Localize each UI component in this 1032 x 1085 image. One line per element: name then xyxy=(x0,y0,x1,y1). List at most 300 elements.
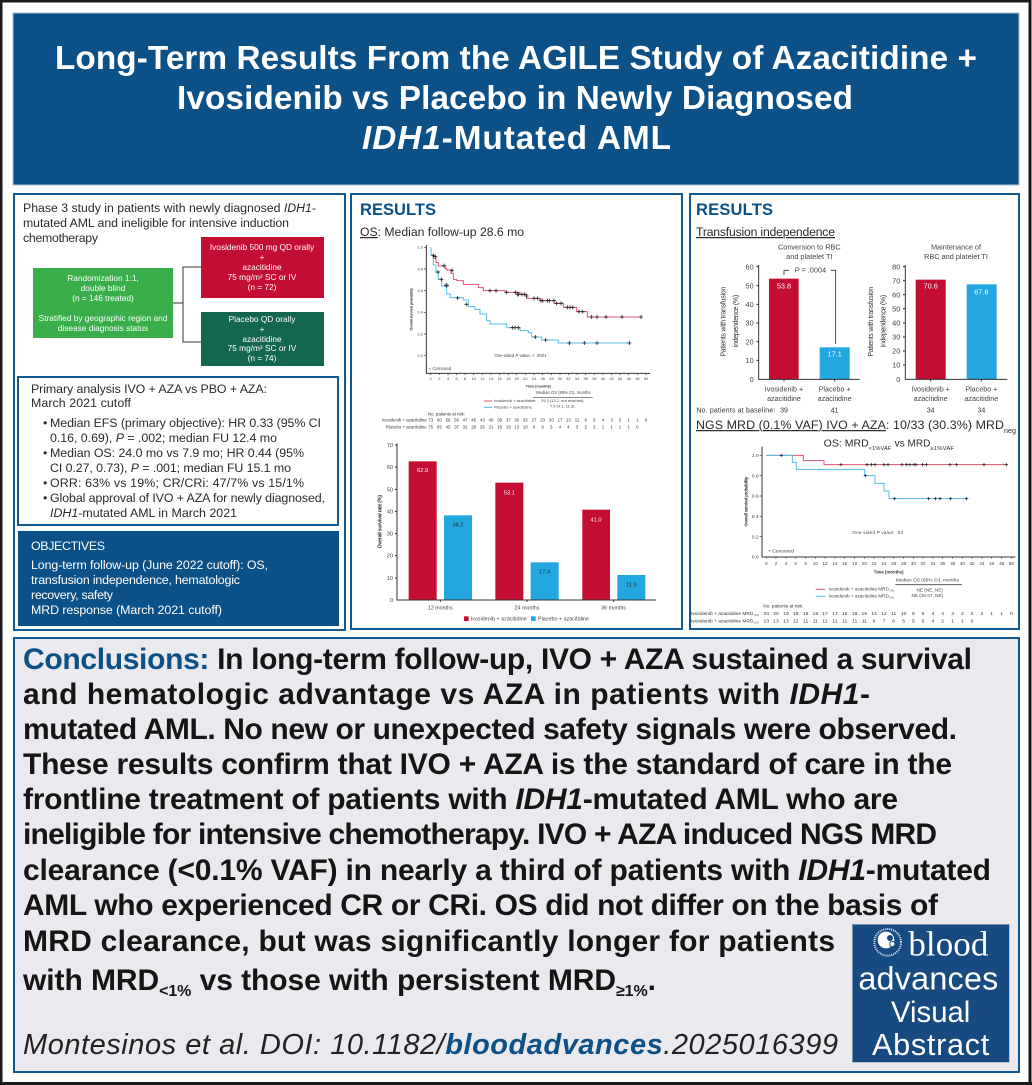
chart: Kaplan-Meier OS by MRD: 22 xyxy=(871,561,877,566)
chart: Kaplan-Meier overall survival: 42 xyxy=(609,376,615,381)
chart: Kaplan-Meier overall survival: 47 xyxy=(463,418,468,423)
chart: Kaplan-Meier OS by MRD: 19 xyxy=(783,611,789,617)
chart: Kaplan-Meier overall survival: 10 xyxy=(471,376,477,381)
chart: Kaplan-Meier OS by MRD: 18 xyxy=(852,561,858,566)
primary analysis box: • xyxy=(43,491,47,505)
chart: Kaplan-Meier OS by MRD: 11 xyxy=(822,619,828,625)
chart: Kaplan-Meier overall survival: 40 xyxy=(601,376,606,381)
chart: Kaplan-Meier OS by MRD: 4 xyxy=(932,611,935,617)
objectives box: recovery, safety xyxy=(31,588,114,602)
chart: conversion to TI bars: Ivosidenib + xyxy=(765,386,803,394)
chart: Kaplan-Meier overall survival: 73 xyxy=(428,418,434,423)
title banner: IDH1-Mutated AML xyxy=(362,120,671,157)
citation: Montesinos et al. DOI: 10.1182/bloodadvances.2025016399 xyxy=(23,1029,838,1061)
chart: Kaplan-Meier overall survival: 1 xyxy=(627,425,630,430)
chart: Kaplan-Meier OS by MRD: 6 xyxy=(794,561,797,566)
panel: study design xyxy=(14,194,345,630)
chart: maintenance of TI bars: independence (%) xyxy=(880,295,887,347)
ivosidenib arm box: (n = 72) xyxy=(248,282,277,292)
conclusions text: Conclusions: In long-term follow-up, IVO + AZA sustained a survival xyxy=(23,643,972,676)
chart: Kaplan-Meier overall survival: 20 xyxy=(514,376,520,381)
chart: Kaplan-Meier overall survival: 1 xyxy=(636,418,639,423)
logo: blood advances visual abstract: Visual xyxy=(891,996,970,1029)
chart: maintenance of TI bars: azacitidine xyxy=(914,395,948,403)
chart: Kaplan-Meier overall survival: Placebo + azacitidine xyxy=(386,425,427,430)
chart: conversion to TI bars: 40 xyxy=(746,300,754,309)
chart: Kaplan-Meier overall survival: 20 xyxy=(549,418,554,423)
chart: Kaplan-Meier overall survival: 50 xyxy=(644,376,649,381)
chart: Kaplan-Meier overall survival: 12 xyxy=(480,376,485,381)
chart: Kaplan-Meier OS by MRD: 40 xyxy=(960,561,965,566)
chart: Kaplan-Meier OS by MRD: 0 xyxy=(765,561,768,566)
chart: Kaplan-Meier overall survival: 40 xyxy=(489,418,494,423)
chart: Kaplan-Meier overall survival: 27 xyxy=(532,418,537,423)
chart: Kaplan-Meier OS by MRD: 0.0 xyxy=(752,555,759,561)
chart: Kaplan-Meier OS by MRD: 11 xyxy=(803,619,808,625)
primary analysis box: Median EFS (primary objective): HR 0.33 (95% CI xyxy=(50,416,321,430)
chart: Kaplan-Meier overall survival: 13 xyxy=(514,425,520,430)
conclusions text: and hematologic advantage vs AZA in patients with IDH1- xyxy=(23,678,870,711)
chart: Kaplan-Meier overall survival: Ivosidenib + azacitidine xyxy=(382,418,427,423)
chart: Kaplan-Meier overall survival: 19 xyxy=(497,425,503,430)
chart: Kaplan-Meier OS by MRD: 5 xyxy=(922,611,925,617)
conclusions text: mutated AML. No new or unexpected safety signals were observed. xyxy=(23,713,957,746)
chart: Kaplan-Meier overall survival: 6 xyxy=(541,425,544,430)
chart: Kaplan-Meier OS by MRD: 1 xyxy=(990,611,993,617)
chart: Kaplan-Meier OS by MRD: Ivosidenib + azacitidine MRD xyxy=(829,587,889,592)
study description: Phase 3 study in patients with newly diagnosed IDH1- xyxy=(23,201,316,215)
title banner: Ivosidenib vs Placebo in Newly Diagnosed xyxy=(177,80,853,117)
logo: blood advances visual abstract xyxy=(852,924,1009,1062)
chart: Kaplan-Meier overall survival: 34 xyxy=(575,376,580,381)
chart: Kaplan-Meier OS by MRD: 18 xyxy=(803,611,809,617)
primary analysis box: Global approval of IVO + AZA for newly diagnosed, xyxy=(50,491,325,505)
chart: Kaplan-Meier OS by MRD: 48 xyxy=(999,561,1005,566)
chart: conversion to TI bars: 17.1 xyxy=(828,349,842,358)
icon: society seal xyxy=(874,929,901,956)
chart: Kaplan-Meier overall survival: 1.0 xyxy=(417,245,424,250)
chart: Kaplan-Meier overall survival: 21 xyxy=(489,425,494,430)
logo: blood advances visual abstract: blood xyxy=(908,925,989,964)
chart: Kaplan-Meier OS by MRD: <1% xyxy=(889,589,895,593)
placebo arm box: Placebo QD orally xyxy=(229,314,296,324)
chart: conversion to TI bars: 10 xyxy=(746,356,754,365)
conclusions text: with MRD xyxy=(23,964,159,997)
chart: Kaplan-Meier OS by MRD xyxy=(691,439,1015,625)
chart: Kaplan-Meier overall survival xyxy=(382,245,650,430)
chart: Kaplan-Meier overall survival: 50 xyxy=(454,418,460,423)
chart: Kaplan-Meier OS by MRD: 2 xyxy=(961,611,964,617)
chart: maintenance of TI bars: RBC and platelet TI xyxy=(924,252,988,261)
chart: overall survival rate bars: 17.4 xyxy=(539,569,550,575)
chart: maintenance of TI bars: 67.6 xyxy=(974,287,988,296)
NGS MRD subheading: NGS MRD (0.1% VAF) IVO + AZA: 10/33 (30.3%) MRD xyxy=(696,418,1004,432)
chart: Kaplan-Meier overall survival: 56 xyxy=(446,418,451,423)
chart: Kaplan-Meier overall survival: 1 xyxy=(610,425,613,430)
chart: overall survival rate bars: 24 months xyxy=(515,605,540,611)
chart: Kaplan-Meier overall survival: + Censored xyxy=(429,366,452,371)
chart: Kaplan-Meier OS by MRD: 4 xyxy=(941,611,944,617)
chart: conversion to TI bars: Placebo + xyxy=(819,386,851,394)
placebo arm box: (n = 74) xyxy=(248,353,277,363)
chart: Kaplan-Meier OS by MRD: 11 xyxy=(891,611,896,617)
randomization box: Stratified by geographic region and xyxy=(39,313,168,323)
chart: Kaplan-Meier OS by MRD: 8 xyxy=(912,611,915,617)
chart: conversion to TI bars: P = .0004 xyxy=(795,266,826,275)
chart: Kaplan-Meier overall survival: 10 xyxy=(523,425,528,430)
chart: Kaplan-Meier overall survival: 25 xyxy=(480,425,485,430)
chart: conversion to TI bars: 0 xyxy=(750,375,754,384)
chart: overall survival rate bars: 11.9 xyxy=(626,583,637,589)
chart: maintenance of TI bars: 50 xyxy=(892,304,900,313)
chart: Kaplan-Meier overall survival: 1 xyxy=(627,418,630,423)
chart: Kaplan-Meier overall survival: 36 xyxy=(583,376,589,381)
chart: maintenance of TI bars: 80 xyxy=(892,262,900,271)
objectives box: Long-term follow-up (June 2022 cutoff): OS, xyxy=(31,558,268,572)
chart: Kaplan-Meier OS by MRD: 0.6 xyxy=(752,494,759,500)
chart: Kaplan-Meier overall survival: 32 xyxy=(463,425,468,430)
chart: Kaplan-Meier OS by MRD: + Censored xyxy=(768,548,794,554)
chart: Kaplan-Meier OS by MRD: 11 xyxy=(862,619,867,625)
randomization box: double blind xyxy=(81,283,126,293)
objectives box: MRD response (March 2021 cutoff) xyxy=(31,603,222,617)
randomization box: (n = 146 treated) xyxy=(72,293,134,303)
chart: Kaplan-Meier overall survival: 0.6 xyxy=(417,288,424,293)
ivosidenib arm box: + xyxy=(260,252,265,262)
chart: Kaplan-Meier overall survival: Placebo + azacitidine: xyxy=(494,404,533,409)
chart: overall survival rate bars: 40 xyxy=(387,509,393,515)
conclusions text: frontline treatment of patients with IDH1-mutated AML who are xyxy=(23,783,898,816)
patients at baseline row: 39 xyxy=(780,408,788,415)
chart: Kaplan-Meier OS by MRD: 16 xyxy=(842,611,848,617)
chart: Kaplan-Meier OS by MRD: 4 xyxy=(785,561,788,566)
chart: Kaplan-Meier OS by MRD: 0 xyxy=(1010,611,1013,617)
chart: Kaplan-Meier OS by MRD: 0.2 xyxy=(752,534,759,540)
ivosidenib arm box: azacitidine xyxy=(242,262,282,272)
chart: Kaplan-Meier overall survival: 2 xyxy=(584,425,587,430)
chart: Kaplan-Meier overall survival: 14 xyxy=(489,376,494,381)
chart: Kaplan-Meier OS by MRD: Ivosidenib + azacitidine MRD xyxy=(691,620,753,625)
chart: Kaplan-Meier overall survival: 75 xyxy=(428,425,434,430)
conclusions text: AML who experienced CR or CRi. OS did not differ on the basis of xyxy=(23,889,939,922)
chart: maintenance of TI bars: Ivosidenib + xyxy=(911,386,950,394)
conclusions text: clearance (<0.1% VAF) in nearly a third of patients with IDH1-mutated xyxy=(23,854,991,887)
conclusions text: . xyxy=(648,964,656,997)
chart: Kaplan-Meier overall survival: 39 xyxy=(497,418,503,423)
chart: overall survival rate bars: 60 xyxy=(387,465,393,471)
chart: Kaplan-Meier OS by MRD: 2 xyxy=(775,561,778,566)
placebo arm box xyxy=(201,312,324,366)
primary analysis box: March 2021 cutoff xyxy=(31,396,132,410)
chart: Kaplan-Meier OS by MRD: 11 xyxy=(832,619,838,625)
chart: Kaplan-Meier OS by MRD: 16 xyxy=(852,611,858,617)
conclusions text: ≥1% xyxy=(616,983,648,1000)
chart: Kaplan-Meier OS by MRD: 1.0 xyxy=(752,453,759,459)
chart: conversion to TI bars xyxy=(721,242,860,403)
chart: conversion to TI bars: Conversion to RBC xyxy=(778,242,841,251)
randomization box: disease diagnosis status xyxy=(58,323,148,333)
chart: Kaplan-Meier overall survival: 29.3 (13.2, not reached) xyxy=(541,398,584,403)
chart: Kaplan-Meier overall survival: 16 xyxy=(497,376,503,381)
chart: Kaplan-Meier OS by MRD: No. patients at risk: xyxy=(763,604,803,609)
patients at baseline row: 34 xyxy=(977,408,985,415)
chart: Kaplan-Meier OS by MRD: <1%VAF xyxy=(869,446,892,452)
chart: maintenance of TI bars: 70.6 xyxy=(924,281,938,290)
placebo arm box: azacitidine xyxy=(242,334,282,344)
chart: Kaplan-Meier OS by MRD: 24 xyxy=(881,561,887,566)
chart: Kaplan-Meier overall survival: 37 xyxy=(506,418,511,423)
chart: Kaplan-Meier OS by MRD: 11 xyxy=(842,619,847,625)
chart: Kaplan-Meier overall survival: 46 xyxy=(626,376,632,381)
chart: Kaplan-Meier OS by MRD: 13 xyxy=(773,619,779,625)
chart: Kaplan-Meier overall survival: 4 xyxy=(602,418,605,423)
chart: Kaplan-Meier OS by MRD: 38 xyxy=(950,561,956,566)
chart: Kaplan-Meier overall survival: 2 xyxy=(438,376,441,381)
chart: Kaplan-Meier OS by MRD: 46 xyxy=(989,561,995,566)
transfusion independence subheading: Transfusion independence xyxy=(696,225,835,239)
chart: Kaplan-Meier OS by MRD: 18 xyxy=(813,611,818,617)
chart: Kaplan-Meier overall survival: 0.4 xyxy=(417,310,424,315)
chart: overall survival rate bars: Ivosidenib + azacitidine xyxy=(471,616,527,622)
chart: Kaplan-Meier overall survival: 3 xyxy=(619,418,622,423)
chart: Kaplan-Meier OS by MRD: 13 xyxy=(783,619,789,625)
chart: Kaplan-Meier overall survival: 43 xyxy=(480,418,485,423)
logo: blood advances visual abstract: Abstract xyxy=(872,1028,990,1062)
chart: Kaplan-Meier overall survival: 8 xyxy=(533,425,536,430)
chart: Kaplan-Meier overall survival: 3 xyxy=(576,425,579,430)
patients at baseline row: No. patients at baseline: xyxy=(696,408,775,415)
patients at baseline row: 41 xyxy=(831,408,839,415)
chart: Kaplan-Meier OS by MRD: 50 xyxy=(1009,561,1014,566)
conclusions text: MRD clearance, but was significantly longer for patients xyxy=(23,925,835,958)
chart: Kaplan-Meier OS by MRD: 19 xyxy=(793,611,799,617)
chart: maintenance of TI bars: azacitidine xyxy=(964,395,998,403)
chart: Kaplan-Meier overall survival: 1 xyxy=(602,425,605,430)
chart: Kaplan-Meier overall survival: 18 xyxy=(506,376,511,381)
chart: Kaplan-Meier OS by MRD: 14 xyxy=(832,561,838,566)
chart: Kaplan-Meier overall survival: Overall survival probability xyxy=(410,287,414,331)
chart: Kaplan-Meier OS by MRD: 13 xyxy=(764,619,769,625)
objectives box xyxy=(18,531,339,626)
chart: overall survival rate bars: 53.1 xyxy=(504,490,515,496)
study description xyxy=(23,201,316,245)
chart: Kaplan-Meier overall survival: 48 xyxy=(635,376,640,381)
patients at baseline row: 34 xyxy=(927,408,935,415)
primary analysis box: ORR: 63% vs 19%; CR/CRi: 47/7% vs 15/1% xyxy=(50,476,304,490)
primary analysis box xyxy=(18,377,338,525)
chart: maintenance of TI bars: 70 xyxy=(892,276,900,285)
chart: conversion to TI bars: azacitidine xyxy=(818,395,852,403)
chart: Kaplan-Meier overall survival: 19 xyxy=(506,425,511,430)
chart: Kaplan-Meier OS by MRD: 20 xyxy=(764,611,769,617)
chart: Kaplan-Meier overall survival: Ivosidenib + azacitidine: xyxy=(494,398,536,403)
chart: Kaplan-Meier OS by MRD: 2 xyxy=(981,611,984,617)
chart: Kaplan-Meier OS by MRD: 17 xyxy=(832,611,838,617)
chart: Kaplan-Meier OS by MRD: NE (20.07, NE) xyxy=(912,593,944,598)
chart: maintenance of TI bars: Patients with transfusion xyxy=(868,287,875,357)
chart: Kaplan-Meier OS by MRD: 26 xyxy=(891,561,897,566)
chart: Kaplan-Meier OS by MRD: 32 xyxy=(920,561,926,566)
chart: Kaplan-Meier OS by MRD: Ivosidenib + azacitidine MRD xyxy=(691,612,753,617)
chart: Kaplan-Meier overall survival: 45 xyxy=(471,418,477,423)
chart: maintenance of TI bars: 40 xyxy=(892,319,900,328)
chart: overall survival rate bars: 12 months xyxy=(428,605,453,611)
chart: Kaplan-Meier overall survival: 8 xyxy=(464,376,467,381)
primary analysis box: Median OS: 24.0 mo vs 7.9 mo; HR 0.44 (95% xyxy=(50,446,304,460)
chart: Kaplan-Meier OS by MRD: 11 xyxy=(813,619,818,625)
chart: Kaplan-Meier overall survival: 4 xyxy=(559,425,562,430)
chart: Kaplan-Meier OS by MRD: 10 xyxy=(901,611,907,617)
chart: Kaplan-Meier OS by MRD: vs MRD xyxy=(895,439,930,450)
chart: Kaplan-Meier overall survival: 45 xyxy=(446,425,451,430)
chart: Kaplan-Meier overall survival: 0 xyxy=(645,418,648,423)
chart: conversion to TI bars: Patients with transfusion xyxy=(721,287,728,357)
chart: Kaplan-Meier OS by MRD: 16 xyxy=(862,611,867,617)
chart: conversion to TI bars: 50 xyxy=(746,281,754,290)
chart: Kaplan-Meier OS by MRD: Overall survival probability xyxy=(743,476,748,527)
chart: Kaplan-Meier OS by MRD: One-sided P value: .03 xyxy=(852,530,903,535)
conclusions text: <1% xyxy=(159,983,191,1000)
chart: Kaplan-Meier overall survival: 22 xyxy=(523,376,528,381)
chart: Kaplan-Meier OS by MRD: 1 xyxy=(961,619,964,625)
chart: maintenance of TI bars: 10 xyxy=(892,361,900,370)
chart: conversion to TI bars: 60 xyxy=(746,262,754,271)
chart: Kaplan-Meier OS by MRD: 7 xyxy=(883,619,886,625)
logo: blood advances visual abstract: advances xyxy=(858,960,998,996)
conclusions text: ineligible for intensive chemotherapy. IVO + AZA induced NGS MRD xyxy=(23,818,937,851)
chart: Kaplan-Meier OS by MRD: 5 xyxy=(922,619,925,625)
conclusions text: vs those with persistent MRD xyxy=(191,964,616,997)
chart: maintenance of TI bars xyxy=(868,242,1007,403)
results heading: RESULTS xyxy=(360,201,436,219)
chart: Kaplan-Meier OS by MRD: 0.4 xyxy=(752,514,759,520)
chart: conversion to TI bars: azacitidine xyxy=(767,395,801,403)
chart: Kaplan-Meier overall survival: 8 xyxy=(584,418,587,423)
chart: Kaplan-Meier OS by MRD: OS: MRD xyxy=(824,439,869,450)
chart: Kaplan-Meier OS by MRD: 44 xyxy=(979,561,985,566)
ivosidenib arm box xyxy=(201,237,324,298)
study description: mutated AML and ineligible for intensive induction xyxy=(23,216,289,230)
chart: Kaplan-Meier overall survival: 5 xyxy=(593,418,596,423)
chart: Kaplan-Meier overall survival: 0.0 xyxy=(417,353,424,358)
chart: conversion to TI bars: and platelet TI xyxy=(786,252,832,261)
chart: overall survival rate bars: 38.2 xyxy=(452,523,464,529)
title banner: Long-Term Results From the AGILE Study of Azacitidine + xyxy=(55,40,977,77)
chart: Kaplan-Meier overall survival: 23 xyxy=(540,418,546,423)
chart: maintenance of TI bars: 30 xyxy=(892,333,900,342)
chart: Kaplan-Meier overall survival: 44 xyxy=(618,376,623,381)
chart: Kaplan-Meier OS by MRD: 0 xyxy=(971,619,974,625)
chart: Kaplan-Meier overall survival: 55 xyxy=(437,425,442,430)
chart: Kaplan-Meier overall survival: 13 xyxy=(566,418,571,423)
chart: maintenance of TI bars: Placebo + xyxy=(965,386,997,394)
chart: Kaplan-Meier OS by MRD: 5 xyxy=(902,619,905,625)
chart: Kaplan-Meier OS by MRD: 8 xyxy=(804,561,807,566)
chart: Kaplan-Meier overall survival: Median OS (95% CI), months xyxy=(536,390,590,395)
chart: overall survival rate bars: Placebo + azacitidine xyxy=(538,616,589,622)
chart: Kaplan-Meier overall survival: 32 xyxy=(523,418,528,423)
objectives box: OBJECTIVES xyxy=(31,539,105,553)
chart: Kaplan-Meier OS by MRD: 4 xyxy=(932,619,935,625)
chart: Kaplan-Meier OS by MRD: 6 xyxy=(892,619,895,625)
chart: Kaplan-Meier overall survival: One-sided P value: < .0001 xyxy=(494,353,547,358)
chart: overall survival rate bars: 20 xyxy=(387,554,393,560)
panel: transfusion independence and MRD results xyxy=(690,194,1019,629)
chart: overall survival rate bars: 0 xyxy=(390,598,393,604)
chart: Kaplan-Meier OS by MRD: 42 xyxy=(969,561,975,566)
chart: Kaplan-Meier OS by MRD: 12 xyxy=(881,611,887,617)
chart: Kaplan-Meier overall survival: 36 xyxy=(514,418,520,423)
chart: Kaplan-Meier OS by MRD: 14 xyxy=(871,611,877,617)
results heading: RESULTS xyxy=(696,201,773,219)
chart: Kaplan-Meier overall survival: 28 xyxy=(471,425,477,430)
primary analysis box: IDH1-mutated AML in March 2021 xyxy=(50,506,237,520)
chart: Kaplan-Meier OS by MRD: 9 xyxy=(873,619,876,625)
chart: overall survival rate bars: Overall survival rate (%) xyxy=(378,495,384,548)
chart: Kaplan-Meier OS by MRD: 1 xyxy=(1000,611,1003,617)
chart: Kaplan-Meier overall survival: 32 xyxy=(566,376,571,381)
randomization box xyxy=(33,268,173,338)
chart: maintenance of TI bars: 60 xyxy=(892,290,900,299)
chart: Kaplan-Meier overall survival: 1 xyxy=(619,425,622,430)
chart: Kaplan-Meier OS by MRD: 20 xyxy=(862,561,867,566)
chart: conversion to TI bars: 20 xyxy=(746,337,754,346)
primary analysis box: CI 0.27, 0.73), P = .001; median FU 15.1 mo xyxy=(50,461,291,475)
chart: overall survival rate bars: 70 xyxy=(387,443,393,449)
chart: Kaplan-Meier OS by MRD: 2 xyxy=(971,611,974,617)
primary analysis box: • xyxy=(43,446,47,460)
chart: Kaplan-Meier OS by MRD: 34 xyxy=(930,561,936,566)
chart: Kaplan-Meier OS by MRD: ≥1% xyxy=(889,596,895,600)
randomization box: Randomization 1:1, xyxy=(67,273,139,283)
chart: Kaplan-Meier OS by MRD: <1% xyxy=(753,613,759,617)
chart: Kaplan-Meier overall survival: 30 xyxy=(558,376,563,381)
chart: Kaplan-Meier OS by MRD: 20 xyxy=(773,611,779,617)
study description: chemotherapy xyxy=(23,231,99,245)
chart: overall survival rate bars: 30 xyxy=(387,532,393,538)
chart: Kaplan-Meier overall survival: 6 xyxy=(456,376,459,381)
chart: overall survival rate bars: 62.9 xyxy=(417,468,428,474)
chart: Kaplan-Meier overall survival: 26 xyxy=(540,376,546,381)
chart: Kaplan-Meier overall survival: Time (months) xyxy=(526,384,552,388)
chart: maintenance of TI bars: 20 xyxy=(892,347,900,356)
chart: Kaplan-Meier overall survival: 0 xyxy=(636,425,639,430)
chart: Kaplan-Meier OS by MRD: 36 xyxy=(940,561,946,566)
chart: Kaplan-Meier overall survival: 3 xyxy=(610,418,613,423)
chart: overall survival rate bars: 10 xyxy=(387,576,393,582)
chart: Kaplan-Meier OS by MRD: 28 xyxy=(901,561,907,566)
chart: Kaplan-Meier OS by MRD: 16 xyxy=(842,561,848,566)
chart: Kaplan-Meier OS by MRD: 12 xyxy=(793,619,799,625)
chart: Kaplan-Meier OS by MRD: ≥1% xyxy=(753,621,759,625)
primary analysis box: • xyxy=(43,416,47,430)
chart: conversion to TI bars: 53.8 xyxy=(777,281,791,290)
chart: overall survival rate bars: 50 xyxy=(387,487,393,493)
OS subheading: OS: Median follow-up 28.6 mo xyxy=(360,225,524,239)
chart: Kaplan-Meier OS by MRD: 1 xyxy=(951,619,954,625)
chart: Kaplan-Meier OS by MRD: 11 xyxy=(852,619,857,625)
chart: maintenance of TI bars: Maintenance of xyxy=(931,242,982,251)
conclusions text xyxy=(22,643,991,1000)
panel: conclusions xyxy=(14,638,1019,1072)
patients at baseline row xyxy=(696,408,985,415)
chart: overall survival rate bars: 41.0 xyxy=(590,517,602,523)
chart: Kaplan-Meier overall survival: 2 xyxy=(593,425,596,430)
chart: Kaplan-Meier overall survival: 37 xyxy=(454,425,460,430)
chart: Kaplan-Meier OS by MRD: 2 xyxy=(941,619,944,625)
chart: Kaplan-Meier OS by MRD: ≥1%VAF xyxy=(930,446,954,452)
chart: Kaplan-Meier overall survival: 28 xyxy=(549,376,554,381)
